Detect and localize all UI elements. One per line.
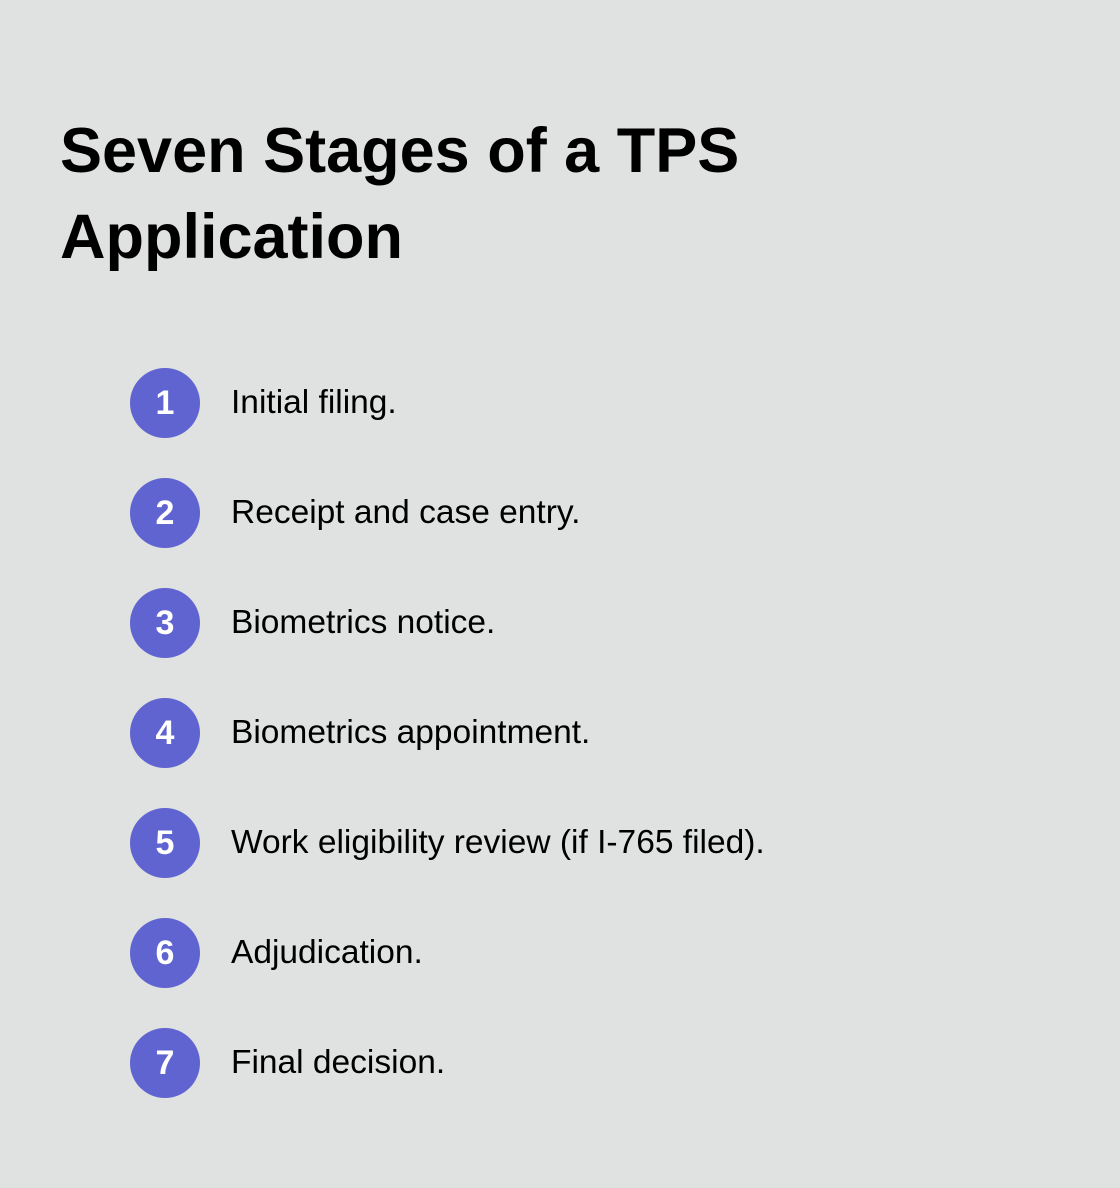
step 7: 7 [156,1044,174,1082]
step 7 [130,1028,445,1098]
step 3: Biometrics notice. [231,604,495,641]
step 2: 2 [156,494,174,532]
step 1: 1 [156,384,174,422]
step 4: Biometrics appointment. [231,714,590,751]
title [60,116,739,272]
step 5: Work eligibility review (if I-765 filed). [231,824,765,861]
step 3: 3 [156,604,174,642]
step 6: Adjudication. [231,934,423,971]
step 3 [130,588,495,658]
title: Seven Stages of a TPS [60,116,739,186]
step 5 [130,808,765,878]
step 2 [130,478,580,548]
title: Application [60,202,403,272]
step 1: Initial filing. [231,384,397,421]
step 7: Final decision. [231,1044,445,1081]
step 1 [130,368,397,438]
step 6: 6 [156,934,174,972]
step 4 [130,698,590,768]
step 6 [130,918,423,988]
step 5: 5 [156,824,174,862]
step 2: Receipt and case entry. [231,494,580,531]
step 4: 4 [156,714,174,752]
